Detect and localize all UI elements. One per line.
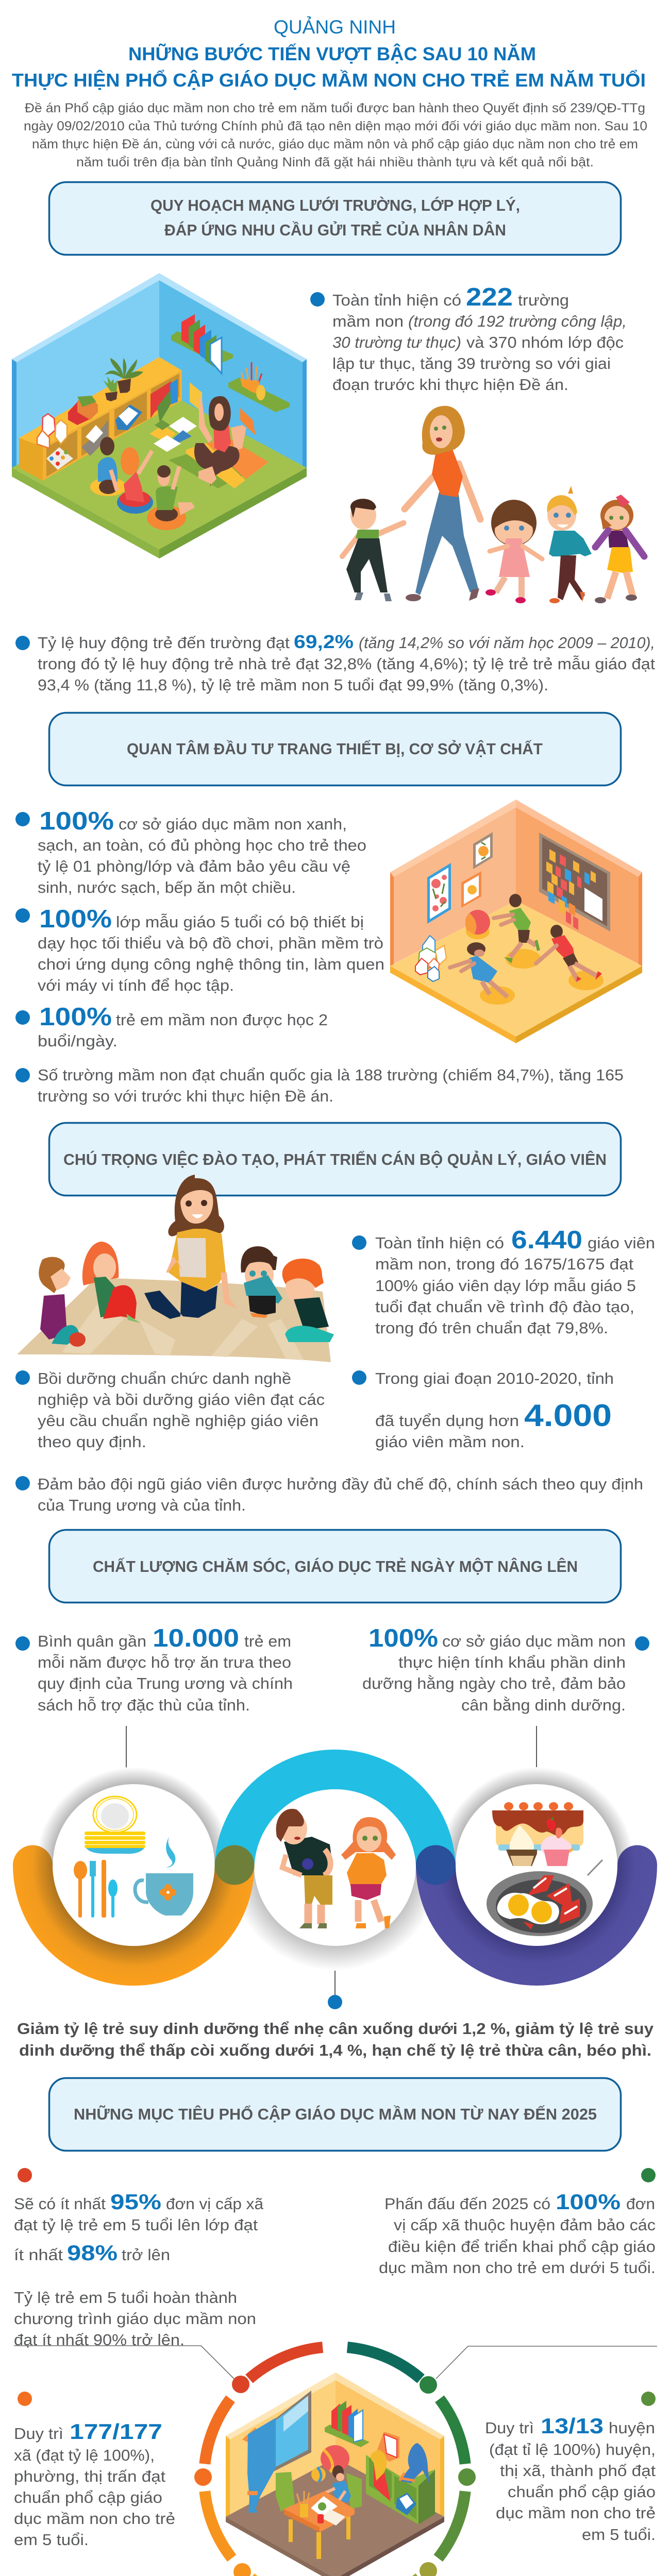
target: 100% commune units: vị cấp xã thuộc huyện đảm bảo các xyxy=(394,2216,656,2234)
target: 95% and 98%: đạt tỷ lệ trẻ em 5 tuổi lên lớp đạt xyxy=(14,2216,258,2234)
section heading: care quality: CHẤT LƯỢNG CHĂM SÓC, GIÁO DỤC TRẺ NGÀY MỘT NÂNG LÊN xyxy=(93,1557,578,1575)
target: 95% and 98%: ít nhất xyxy=(14,2246,63,2264)
bullet: 5-year-old classes equipment: với máy vi tính để học tập. xyxy=(38,976,234,994)
bullet: clean kindergartens: tỷ lệ 01 phòng/lớp và đảm bảo yêu cầu vệ xyxy=(38,857,350,875)
wall pictures xyxy=(427,832,493,924)
bullet: 6,440 teachers: mầm non, trong đó 1675/1675 đạt xyxy=(375,1255,633,1273)
bullet: 6,440 teachers: trong đó trên chuẩn đạt 79,8%. xyxy=(375,1319,608,1337)
section heading: staff training: CHÚ TRỌNG VIỆC ĐÀO TẠO, PHÁT TRIỂN CÁN BỘ QUẢN LÝ, GIÁO VIÊN xyxy=(63,1150,607,1168)
target: 13/13 districts: (đạt tỉ lệ 100%) huyện, xyxy=(489,2441,656,2459)
illustration: teacher reading to children on carpet xyxy=(17,1175,334,1362)
bullet: 10,000 children: mỗi năm được hỗ trợ ăn trưa theo xyxy=(38,1653,291,1671)
carpet xyxy=(17,1278,331,1362)
target: 177/177 communes: phường, thị trấn đạt xyxy=(14,2467,165,2485)
bullet: professional training: nghiệp và bồi dưỡng giáo viên đạt các xyxy=(38,1391,325,1409)
wall shelf with books xyxy=(325,2401,370,2447)
target: 13/13 districts xyxy=(485,2392,656,2544)
bullet: nutrition portions: 100% xyxy=(368,1624,438,1652)
bullet: 10,000 children: Bình quân gần xyxy=(38,1632,146,1650)
title: NHỮNG BƯỚC TIẾN VƯỢT BẬC SAU 10 NĂM xyxy=(128,43,536,64)
section heading: network planning: QUY HOẠCH MẠNG LƯỚI TRƯỜNG, LỚP HỢP LÝ, xyxy=(150,196,520,214)
intro text: năm thực hiện Đề án, cùng với cả nước, giáo dục mầm nôn và phổ cập giáo dục nầm non cho trẻ em xyxy=(32,137,638,151)
wall shelf with pencils xyxy=(228,362,290,412)
bullet: 222 schools xyxy=(310,283,627,394)
bullet: 5-year-old classes equipment xyxy=(15,905,384,994)
title: THỰC HIỆN PHỔ CẬP GIÁO DỤC MẦM NON CHO TRẺ EM NĂM TUỔI xyxy=(12,69,646,91)
bullet: 10,000 children: sách hỗ trợ đặc thù của tỉnh. xyxy=(38,1696,250,1714)
bullet: two sessions per day xyxy=(15,1003,328,1050)
teacher xyxy=(405,406,480,601)
title xyxy=(12,43,646,91)
bullet: 222 schools: Toàn tỉnh hiện có xyxy=(332,291,461,309)
plants xyxy=(103,358,143,401)
boy in green xyxy=(494,894,541,969)
target: 95% and 98%: 98% xyxy=(67,2241,118,2265)
bullet: professional training: theo quy định. xyxy=(38,1433,146,1451)
bullet: 222 schools: 222 xyxy=(466,283,513,311)
boy xyxy=(342,499,404,601)
bullet: mobilization rate: Tỷ lệ huy động trẻ đến trường đạt xyxy=(38,634,290,652)
girl with orange hair xyxy=(82,1242,140,1323)
bullet: national standard schools: trường so với trước khi thực hiện Đề án. xyxy=(38,1087,333,1105)
section heading: targets to 2025: NHỮNG MỤC TIÊU PHỔ CẬP GIÁO DỤC MẦM NON TỪ NAY ĐẾN 2025 xyxy=(74,2105,597,2123)
bullet: 4,000 recruited: đã tuyển dụng hơn xyxy=(375,1412,519,1430)
bullet: 222 schools: đoạn trước khi thực hiện Đề án. xyxy=(332,376,568,394)
teacher xyxy=(144,1175,237,1319)
icon: plates and cutlery xyxy=(74,1797,193,1918)
target: 95% and 98%: 95% xyxy=(110,2190,161,2214)
target: 100% commune units: 100% xyxy=(556,2190,621,2214)
region label: Quảng Ninh: QUẢNG NINH xyxy=(274,16,396,38)
orange ring xyxy=(33,1865,234,1966)
bullet: 10,000 children: quy định của Trung ương và chính xyxy=(38,1674,293,1692)
bullet: 10,000 children: 10.000 xyxy=(153,1624,239,1652)
bullet: 5-year-old classes equipment: chơi ứng dụng công nghệ thông tin, làm quen xyxy=(38,955,384,973)
section heading: care quality xyxy=(49,1530,621,1602)
target: 90% program completion: đạt ít nhất 90% trở lên. xyxy=(14,2331,185,2349)
bullet: teacher policies xyxy=(15,1475,643,1514)
mat xyxy=(169,439,269,488)
target: 13/13 districts: em 5 tuổi. xyxy=(582,2526,656,2544)
section heading: network planning xyxy=(49,182,621,255)
ring arcs xyxy=(205,2347,465,2576)
window and curtain xyxy=(242,2391,311,2513)
bullet: mobilization rate: (tăng 14,2% so với năm học 2009 – 2010), xyxy=(359,634,655,652)
bullet: 6,440 teachers: tuổi đạt chuẩn về trình độ đào tạo, xyxy=(375,1298,634,1316)
floor paper xyxy=(149,417,197,452)
bullet: professional training: yêu cầu chuẩn nghề nghiệp giáo viên xyxy=(38,1412,319,1430)
target: 177/177 communes: em 5 tuổi. xyxy=(14,2531,89,2549)
target: 177/177 communes: 177/177 xyxy=(70,2419,162,2444)
boy with ginger hair xyxy=(282,1259,334,1342)
bullet: two sessions per day: buổi/ngày. xyxy=(38,1032,118,1050)
target: 90% program completion xyxy=(14,2289,256,2349)
bullet: mobilization rate: 69,2% xyxy=(294,631,354,652)
bullet: clean kindergartens: cơ sở giáo dục mầm non xanh, xyxy=(119,815,347,833)
bullet: two sessions per day: 100% xyxy=(39,1003,112,1031)
section heading: targets to 2025 xyxy=(49,2078,621,2150)
target: 13/13 districts: dục mầm non cho trẻ xyxy=(496,2504,656,2522)
boy with teal scarf xyxy=(241,1246,282,1318)
target: 13/13 districts: chuẩn phổ cập giáo xyxy=(508,2483,656,2501)
bullet: nutrition portions: thực hiện tính khẩu phần dinh xyxy=(398,1653,626,1671)
section heading: equipment xyxy=(49,713,621,785)
section heading: staff training xyxy=(49,1123,621,1195)
bullet: mobilization rate: 93,4 % (tăng 11,8 %), tỷ lệ trẻ mầm non 5 tuổi đạt 99,9% (tăng 0,3%). xyxy=(38,676,548,694)
segmented ring with dots xyxy=(14,2346,657,2576)
section heading: network planning: ĐÁP ỨNG NHU CẦU GỬI TRẺ CỦA NHÂN DÂN xyxy=(164,221,506,239)
bullet: clean kindergartens: sinh, nước sạch, bếp ăn một chiều. xyxy=(38,878,296,896)
letter blocks xyxy=(415,936,446,981)
intro text: năm tuổi trên địa bàn tỉnh Quảng Ninh đã gặt hái nhiều thành tựu và kết quả nổi bật. xyxy=(76,155,594,170)
bullet: 222 schools: và 370 nhóm lớp độc xyxy=(466,333,624,351)
ball xyxy=(465,910,490,939)
target: 90% program completion: Tỷ lệ trẻ em 5 tuổi hoàn thành xyxy=(14,2289,237,2307)
target: 100% commune units: Phấn đấu đến 2025 có xyxy=(384,2195,550,2213)
connector lines xyxy=(14,2346,657,2576)
bullet: 6,440 teachers: 100% giáo viên dạy lớp mẫu giáo 5 xyxy=(375,1277,636,1295)
bullet: 4,000 recruited: Trong giai đoạn 2010-2020, tỉnh xyxy=(375,1369,614,1387)
target: 177/177 communes: Duy trì xyxy=(14,2425,63,2443)
target: 13/13 districts: huyện xyxy=(609,2419,655,2437)
purple ring xyxy=(436,1865,637,1966)
target: 100% commune units: dục mầm non cho trẻ em dưới 5 tuổi. xyxy=(379,2259,656,2277)
illustration: playroom with child painting xyxy=(226,2372,444,2576)
chairs, table and child xyxy=(276,2465,362,2559)
target: 13/13 districts: Duy trì xyxy=(485,2419,534,2437)
bullet: 5-year-old classes equipment: lớp mẫu giáo 5 tuổi có bộ thiết bị xyxy=(116,913,364,931)
illustration: teacher with children walking xyxy=(342,406,644,603)
low shelf unit xyxy=(19,357,182,481)
illustration: blue classroom xyxy=(12,273,307,558)
bullet: professional training xyxy=(15,1369,325,1451)
bullet: clean kindergartens: 100% xyxy=(39,807,114,835)
target: 95% and 98% xyxy=(14,2168,264,2265)
bullet: 10,000 children: trẻ em xyxy=(244,1632,291,1650)
target: 13/13 districts: 13/13 xyxy=(541,2414,604,2438)
bullet: 5-year-old classes equipment: 100% xyxy=(39,905,112,933)
bullet: nutrition portions: cơ sở giáo dục mầm non xyxy=(442,1632,626,1650)
bullet: nutrition portions: dưỡng hằng ngày cho trẻ, đảm bảo xyxy=(362,1674,626,1692)
bullet: teacher policies: Đảm bảo đội ngũ giáo viên được hưởng đầy đủ chế độ, chính sách theo quy định xyxy=(38,1475,643,1493)
girl with brown hair xyxy=(485,500,542,603)
intro text xyxy=(24,101,647,170)
bullet: 222 schools: 30 trường tư thục) xyxy=(332,333,461,351)
target: 177/177 communes: chuẩn phổ cập giáo xyxy=(14,2488,162,2506)
icon: cake and cupcakes xyxy=(492,1802,583,1866)
bullet: teacher policies: của Trung ương và của tỉnh. xyxy=(38,1496,246,1514)
section heading: equipment: QUAN TÂM ĐẦU TƯ TRANG THIẾT BỊ, CƠ SỞ VẬT CHẤT xyxy=(127,739,543,758)
target: 177/177 communes: dục mầm non cho trẻ xyxy=(14,2510,175,2528)
blond boy xyxy=(547,486,592,603)
cabinet with toys xyxy=(366,2432,435,2524)
intro text: ngày 09/02/2010 của Thủ tướng Chính phủ đã tạo nên diện mạo mới đối với giáo dục mầm non. Sau 10 xyxy=(24,119,647,133)
intro text: Đề án Phổ cập giáo dục mầm non cho trẻ em năm tuổi được ban hành theo Quyết định số 239/QĐ-TTg xyxy=(25,101,645,115)
bullet: mobilization rate: trong đó tỷ lệ huy động trẻ nhà trẻ đạt 32,8% (tăng 4,6%); tỷ lệ trẻ trẻ mẫu giáo đạt xyxy=(38,655,655,673)
target: 95% and 98%: trở lên xyxy=(122,2246,170,2264)
bullet: 222 schools: lập tư thục, tăng 39 trường so với giai xyxy=(332,354,611,372)
bullet: 222 schools: trường xyxy=(518,291,569,309)
illustration: orange playroom xyxy=(390,800,642,1043)
target: 100% commune units: điều kiện để triển khai phổ cập giáo xyxy=(388,2238,656,2256)
boy on the left xyxy=(39,1257,86,1347)
target: 177/177 communes: xã (đạt tỷ lệ 100%), xyxy=(14,2446,155,2464)
summary text: malnutrition rates: dinh dưỡng thể thấp còi xuống dưới 1,4 %, hạn chế tỷ lệ trẻ thừa cân, béo phì. xyxy=(19,2041,651,2059)
bullet: clean kindergartens xyxy=(15,807,366,896)
bullet: 6,440 teachers: giáo viên xyxy=(588,1234,655,1252)
girl in blue xyxy=(450,942,515,1005)
bullet: national standard schools xyxy=(15,1066,624,1105)
teacher xyxy=(190,382,256,487)
bullet: 5-year-old classes equipment: dạy học tối thiểu và bộ đồ chơi, phần mềm trò xyxy=(38,934,383,952)
summary text: malnutrition rates: Giảm tỷ lệ trẻ suy dinh dưỡng thể nhẹ cân xuống dưới 1,2 %, giảm tỷ lệ trẻ suy xyxy=(17,2020,654,2038)
target: 100% commune units xyxy=(379,2168,656,2277)
bullet: 10,000 children xyxy=(15,1624,293,1714)
girl with yellow skirt xyxy=(595,495,644,603)
bullet: 6,440 teachers xyxy=(352,1226,655,1337)
target: 100% commune units: đơn xyxy=(626,2195,655,2213)
bullet: nutrition portions: cân bằng dinh dưỡng. xyxy=(461,1696,626,1714)
bullet: 4,000 recruited: giáo viên mầm non. xyxy=(375,1433,525,1451)
target: 177/177 communes xyxy=(14,2392,175,2549)
icon: two children xyxy=(276,1809,396,1928)
target: 95% and 98%: đơn vị cấp xã xyxy=(166,2195,264,2213)
icon: frying pan with eggs and bacon xyxy=(487,1860,602,1936)
summary text: malnutrition rates xyxy=(17,2020,654,2059)
bullet: 4,000 recruited: 4.000 xyxy=(524,1398,612,1433)
bullet: 222 schools: mầm non xyxy=(332,312,404,330)
sitting children xyxy=(90,437,195,530)
bullet: clean kindergartens: sạch, an toàn, có đủ phòng học cho trẻ theo xyxy=(38,836,366,854)
bullet: nutrition portions xyxy=(362,1624,649,1714)
boy in red xyxy=(536,925,604,990)
bullet: mobilization rate xyxy=(15,631,655,694)
bullet: professional training: Bồi dưỡng chuẩn chức danh nghề xyxy=(38,1369,291,1387)
target: 95% and 98%: Sẽ có ít nhất xyxy=(14,2195,106,2213)
bullet: 4,000 recruited xyxy=(352,1369,614,1451)
target: 13/13 districts: thị xã, thành phố đạt xyxy=(500,2462,656,2480)
bullet: two sessions per day: trẻ em mầm non được học 2 xyxy=(116,1011,328,1029)
balls xyxy=(311,2445,349,2482)
bullet: national standard schools: Số trường mầm non đạt chuẩn quốc gia là 188 trường (chiếm 84,7%), tăng 165 xyxy=(38,1066,624,1084)
wall shelf with books xyxy=(171,314,233,374)
nutrition rings diagram xyxy=(33,1726,637,2009)
blue arc xyxy=(234,1769,436,1865)
bullet: 6,440 teachers: Toàn tỉnh hiện có xyxy=(375,1234,504,1252)
target: 90% program completion: chương trình giáo dục mầm non xyxy=(14,2310,256,2328)
bullet: 6,440 teachers: 6.440 xyxy=(511,1226,582,1254)
alphabet board xyxy=(539,833,610,931)
bullet: 222 schools: (trong đó 192 trường công lập, xyxy=(408,312,627,330)
